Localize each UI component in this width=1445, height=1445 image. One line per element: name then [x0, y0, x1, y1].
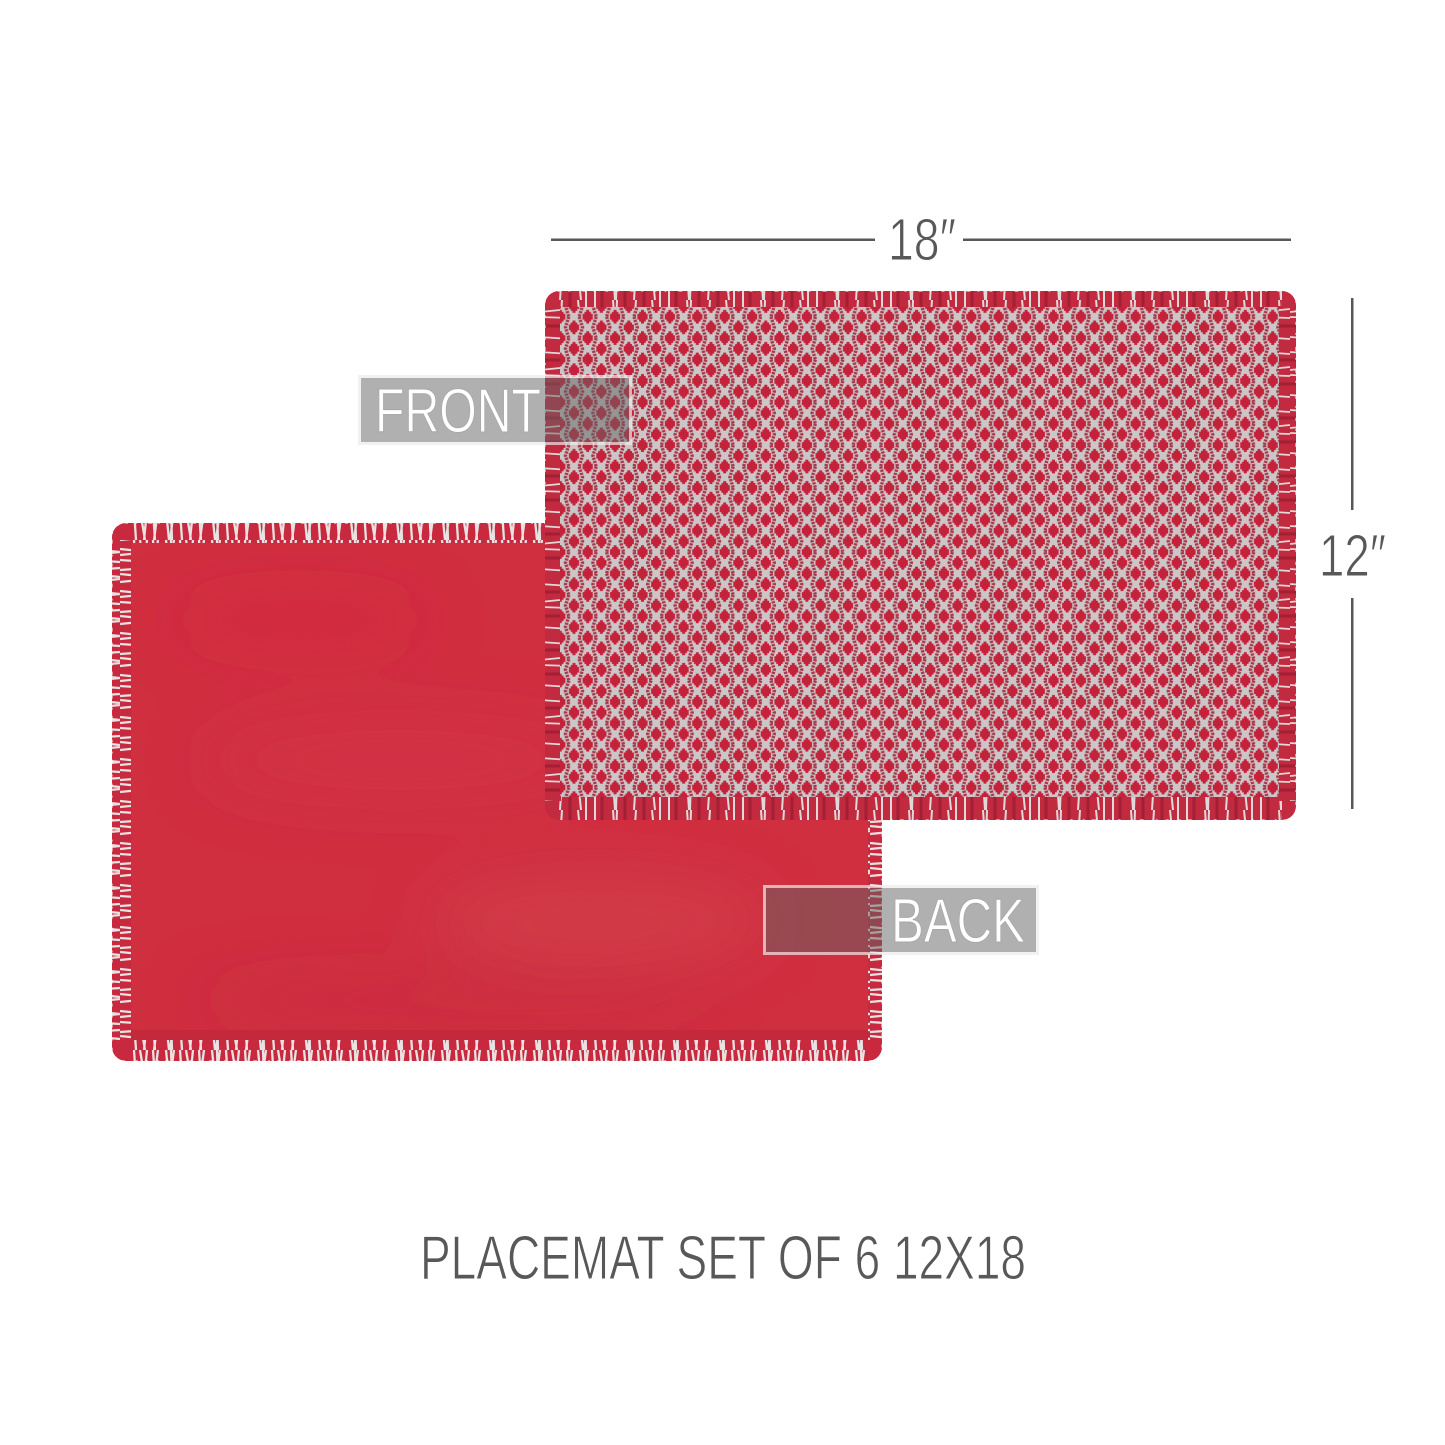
label: FRONT: FRONT [375, 377, 541, 446]
panel: front placemat [543, 289, 1298, 822]
label: BACK [764, 886, 1038, 956]
title: PLACEMAT SET OF 6 12X18 [420, 1224, 1026, 1293]
dimension: height 12 inches: 12″ [1319, 523, 1386, 589]
front woven fabric [560, 307, 1279, 797]
label: BACK: BACK [891, 887, 1025, 956]
front fringe [543, 289, 1298, 822]
panel: back placemat [110, 521, 884, 1063]
back fabric [131, 543, 868, 1040]
back fringe [110, 521, 884, 1063]
dimension: width 18 inches: 18″ [888, 207, 956, 273]
